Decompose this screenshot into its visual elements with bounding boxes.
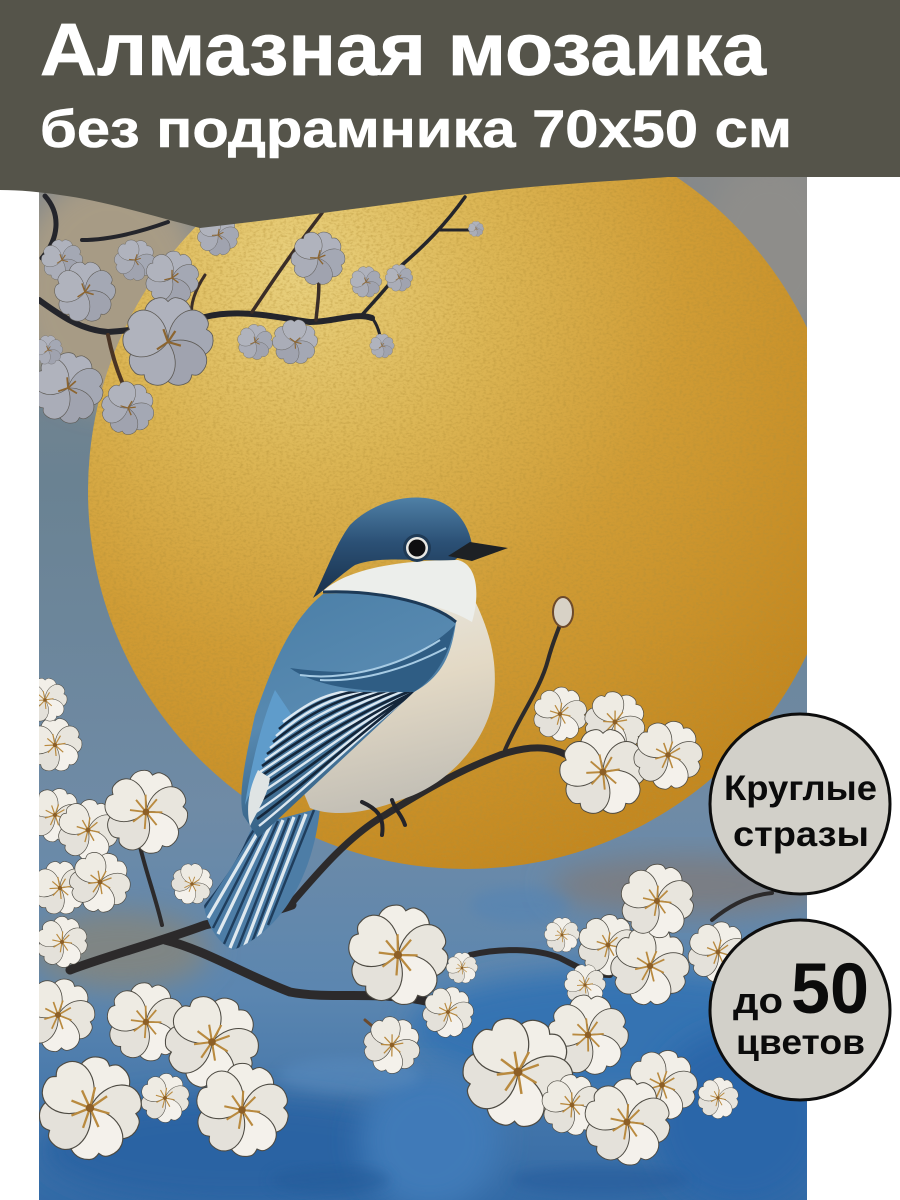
bird belly <box>304 602 495 813</box>
bird wing <box>241 593 456 838</box>
blossoms: lower-left cluster <box>39 678 289 1160</box>
bird <box>204 497 508 950</box>
badge text line 2: стразы <box>733 815 869 854</box>
badge text line 1: Круглые <box>724 769 877 808</box>
badge word: colours: цветов <box>736 1023 865 1062</box>
lower branches <box>70 625 772 1045</box>
bird head <box>313 497 472 598</box>
blossoms: moon right cluster <box>534 686 703 814</box>
flower bud on branch tip <box>553 597 573 627</box>
blossoms: lower-right cluster <box>348 864 742 1166</box>
badge: round rhinestones <box>710 714 890 894</box>
bird throat <box>322 560 476 622</box>
header banner <box>0 0 900 228</box>
bird collar <box>323 592 456 622</box>
badge: up to 50 colours <box>710 920 890 1100</box>
badge number 50: 50 <box>791 950 869 1029</box>
bird feet <box>362 800 405 835</box>
golden moon disc <box>88 177 807 869</box>
blossoms: top-left grey flowers <box>39 221 484 435</box>
painting: bird on blossom branch with golden moon <box>39 177 807 1200</box>
bird eye <box>403 534 431 562</box>
upper branches <box>39 196 475 395</box>
bird tail <box>204 808 320 950</box>
title line 2: без подрамника 70х50 см <box>40 100 792 159</box>
title line 1: Алмазная мозаика <box>40 8 767 91</box>
bird beak <box>448 542 508 561</box>
painting background wash <box>15 160 840 1200</box>
badge word: up to: до <box>733 980 783 1021</box>
